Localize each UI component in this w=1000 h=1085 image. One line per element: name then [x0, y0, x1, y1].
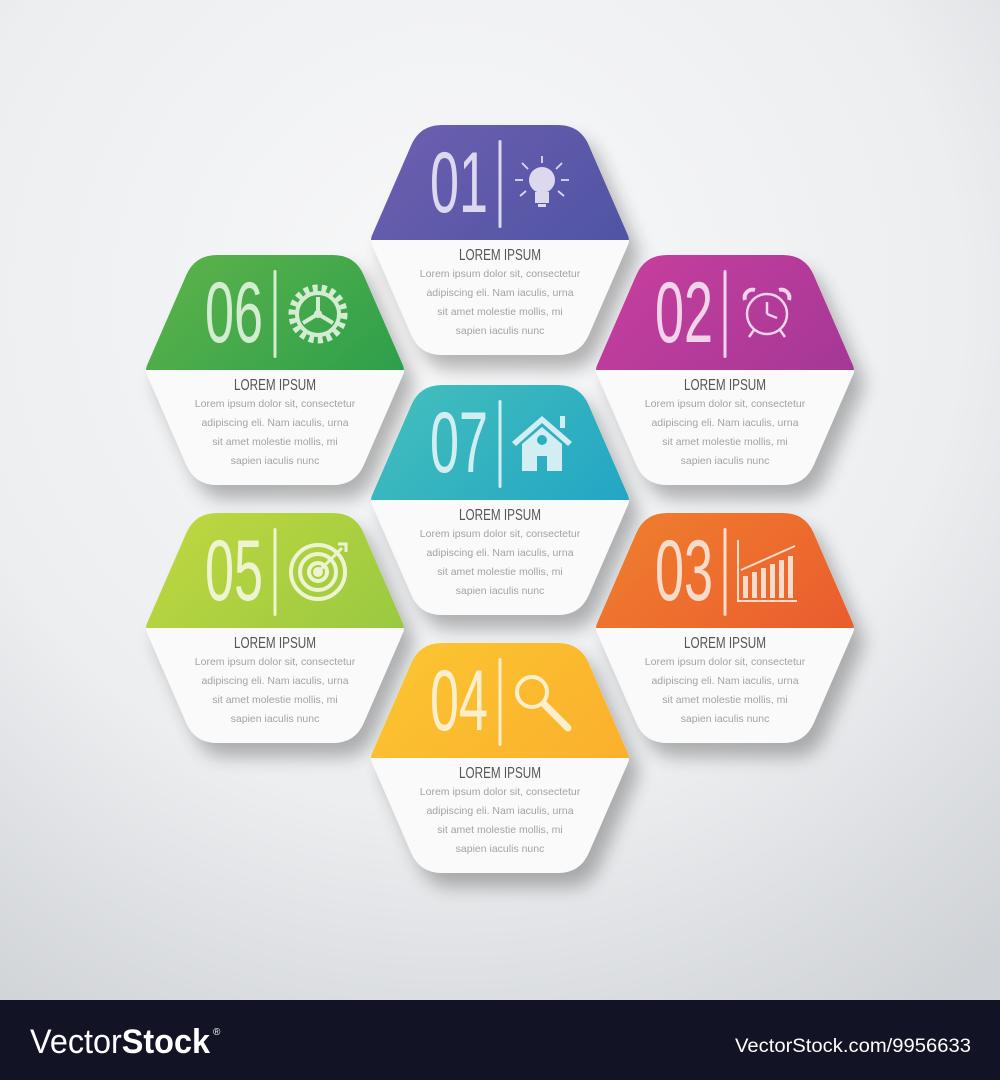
hexagon 05: 05 [205, 523, 263, 619]
hexagon 06 [146, 255, 404, 485]
icon: gear [292, 288, 344, 340]
icon: light bulb [515, 156, 569, 207]
hexagon 03 [596, 513, 854, 743]
hexagon 04: 04 [430, 653, 488, 749]
icon: bar chart [737, 540, 797, 602]
hexagon 07: 07 [430, 395, 488, 491]
hexagon 01: 01 [430, 135, 488, 231]
icon: target [291, 544, 346, 599]
hexagon 05 [146, 513, 404, 743]
footer: ® [213, 1027, 221, 1038]
hexagon 06: 06 [205, 265, 263, 361]
hexagon 02 [596, 255, 854, 485]
hexagon 07 [371, 385, 629, 615]
hexagon 02: 02 [655, 265, 713, 361]
icon: magnifier [517, 677, 568, 728]
icon: alarm clock [745, 290, 789, 337]
icon: house [512, 416, 572, 471]
hexagon 01 [371, 125, 629, 355]
footer: VectorStock.com/9956633 [735, 1036, 971, 1057]
hexagon 04 [371, 643, 629, 873]
footer: VectorStock [30, 1023, 210, 1061]
hexagon 03: 03 [655, 523, 713, 619]
footer [0, 1000, 1000, 1080]
